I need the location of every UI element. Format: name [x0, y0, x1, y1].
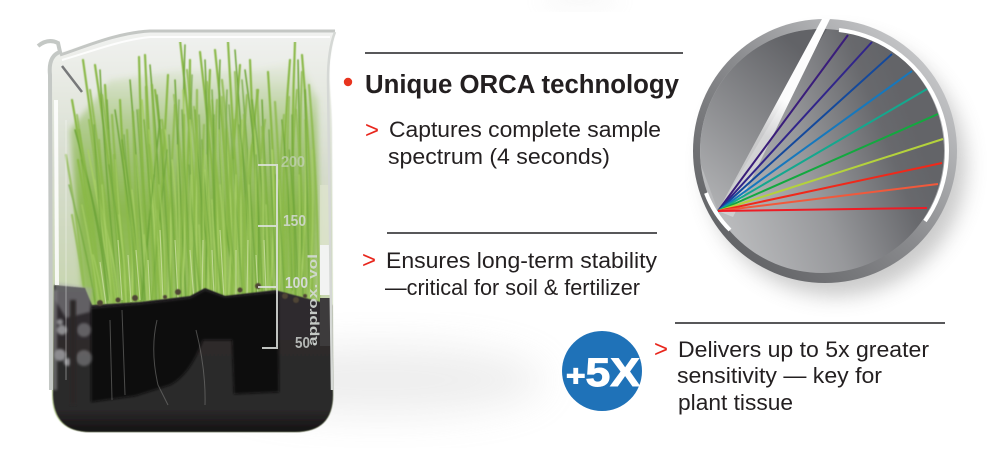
soil — [53, 285, 333, 432]
rule: top — [365, 52, 683, 54]
entrance beam — [718, 19, 830, 217]
glass walls and rim — [38, 31, 335, 390]
grass blades — [64, 42, 320, 305]
rule: middle — [387, 232, 657, 234]
beaker photo with grass and soil — [38, 31, 335, 432]
bullet: captures spectrum: spectrum (4 seconds) — [388, 144, 610, 169]
spectrum rays — [718, 35, 943, 211]
bullet: stability: —critical for soil & fertilizer — [385, 275, 640, 300]
rule: bottom — [675, 322, 945, 324]
entrance slit — [706, 193, 730, 230]
grass mass — [70, 60, 318, 310]
red bullet — [344, 78, 352, 86]
bullet: sensitivity: Delivers up to 5x greater — [678, 337, 930, 362]
graduation scale: 50 — [295, 335, 310, 352]
graduation scale: 150 — [283, 213, 306, 230]
bullet: stability — [362, 247, 658, 300]
bullet: sensitivity: > — [654, 336, 668, 363]
soil speckle — [53, 282, 92, 390]
bullet: stability: Ensures long-term stability — [386, 248, 658, 273]
badge: +5X — [562, 331, 642, 411]
soil crumbs at surface — [97, 283, 307, 306]
dark soil block — [91, 290, 279, 402]
inner disc — [700, 29, 944, 273]
bullet: captures spectrum: > — [365, 117, 379, 144]
graduation scale — [258, 154, 320, 352]
heading: Unique ORCA technology — [365, 71, 680, 99]
bullet: sensitivity — [654, 336, 930, 415]
label strip on glass — [320, 185, 331, 346]
beaker interior — [50, 31, 335, 432]
optics diagram — [693, 19, 966, 296]
page background shadows — [215, 0, 620, 414]
bullet: sensitivity: plant tissue — [678, 390, 793, 415]
light base of blades — [100, 230, 266, 304]
outer rim — [693, 19, 957, 283]
graduation scale: approx. vol — [305, 254, 320, 346]
badge: +5X: +5X — [566, 351, 640, 395]
graduation scale: 100 — [285, 275, 308, 292]
bullet: stability: > — [362, 247, 376, 274]
roots — [110, 310, 205, 405]
detector arc — [839, 30, 947, 221]
bullet: captures spectrum: Captures complete sample — [389, 117, 661, 142]
graduation scale: 200 — [281, 154, 305, 171]
bullet: captures spectrum — [365, 117, 661, 169]
disc shadow — [706, 36, 966, 296]
bullet: sensitivity: sensitivity — key for — [677, 363, 883, 388]
